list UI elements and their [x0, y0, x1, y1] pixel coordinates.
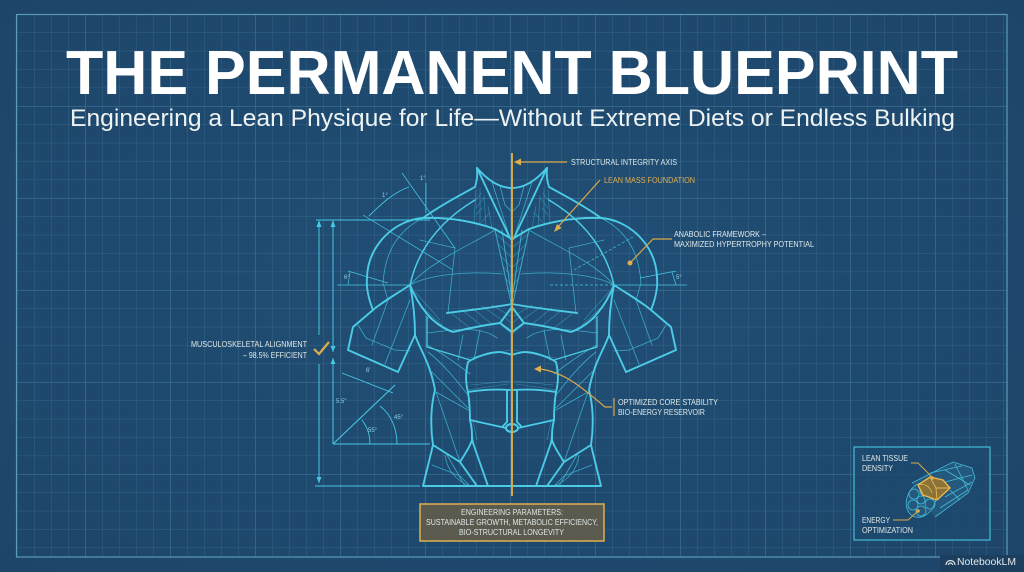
watermark: NotebookLM: NotebookLM: [957, 557, 1016, 568]
callout: anabolic framework: ANABOLIC FRAMEWORK –: [674, 230, 766, 239]
callout: lean mass foundation: [554, 176, 695, 232]
inset panel: lean tissue: LEAN TISSUE: [862, 454, 908, 463]
callout: structural integrity axis: [514, 158, 677, 167]
engineering parameters box: SUSTAINABLE GROWTH, METABOLIC EFFICIENCY,: [426, 518, 598, 527]
icon: highlighted gold fibre: [918, 477, 950, 500]
callout: lean mass foundation: LEAN MASS FOUNDATION: [604, 176, 695, 185]
dimension angle labels: 6°: [344, 275, 350, 281]
callout: core stability: [534, 366, 719, 417]
central axis: [511, 153, 513, 496]
dimension lines: [315, 173, 687, 486]
engineering parameters box: ENGINEERING PARAMETERS:: [461, 508, 563, 517]
watermark: NotebookLM: [940, 555, 1024, 572]
torso blueprint figure: [348, 168, 676, 486]
callout: musculoskeletal alignment: MUSCULOSKELETAL ALIGNMENT: [191, 340, 307, 349]
inset panel: lean tissue: DENSITY: [862, 464, 894, 473]
callout: core stability: OPTIMIZED CORE STABILITY: [618, 398, 719, 407]
callout: musculoskeletal alignment: – 98.5% EFFICIENT: [243, 351, 307, 360]
engineering parameters box: BIO-STRUCTURAL LONGEVITY: [459, 528, 565, 537]
dimension angle labels: 55°: [368, 428, 378, 434]
title: THE PERMANENT BLUEPRINT: [66, 39, 958, 108]
dimension angle labels: 1°: [382, 193, 388, 199]
inset panel: lean tissue: ENERGY: [862, 516, 891, 525]
leaders: [893, 463, 932, 520]
dimension angle labels: 6': [366, 368, 370, 374]
callout: anabolic framework: MAXIMIZED HYPERTROPHY POTENTIAL: [674, 240, 815, 249]
dimension angle labels: [336, 176, 682, 434]
dimension angle labels: 1°: [420, 176, 426, 182]
icon: check mark: [314, 342, 329, 354]
callout: musculoskeletal alignment: [191, 340, 329, 360]
callout: anabolic framework: [628, 230, 815, 266]
dimension angle labels: 5°: [676, 275, 682, 281]
engineering parameters box: [420, 504, 604, 541]
dimension angle labels: 5.5": [336, 399, 346, 405]
inset panel: lean tissue: [854, 447, 990, 540]
inset panel: lean tissue: OPTIMIZATION: [862, 526, 913, 535]
dimension angle labels: 45°: [394, 415, 404, 421]
callout: core stability: BIO-ENERGY RESERVOIR: [618, 408, 705, 417]
callout: structural integrity axis: STRUCTURAL INTEGRITY AXIS: [571, 158, 677, 167]
icon: muscle fibre bundle: [901, 462, 975, 522]
subtitle: Engineering a Lean Physique for Life—Without Extreme Diets or Endless Bulking: [70, 105, 955, 132]
